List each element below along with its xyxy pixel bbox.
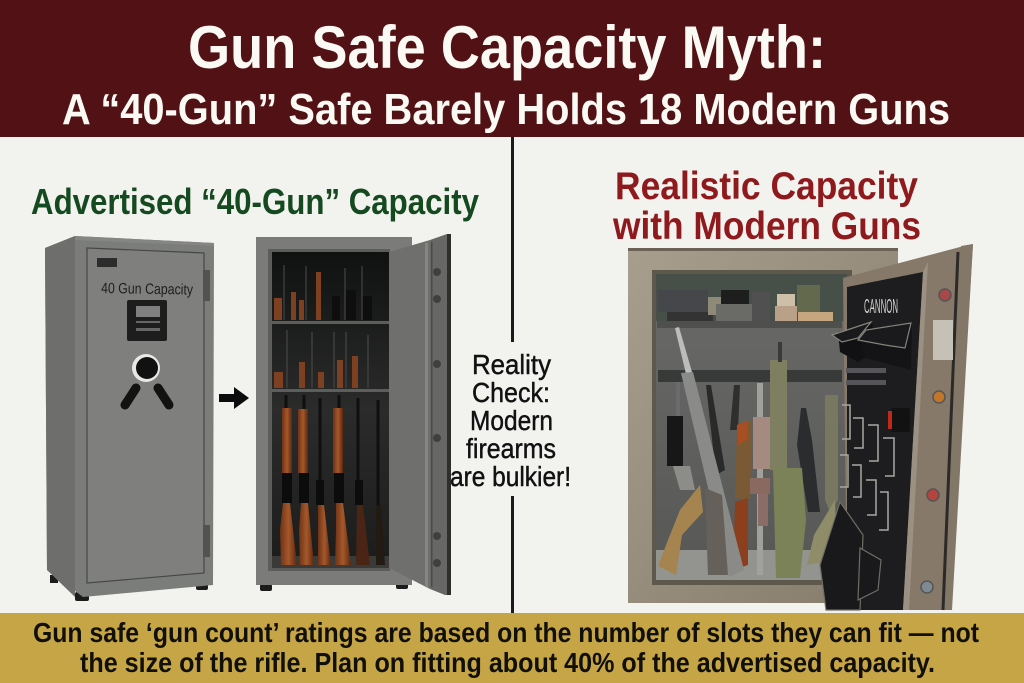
shelves [272,321,389,392]
title line 1: Gun Safe Capacity Myth: [188,14,826,81]
door inner panel [847,272,923,610]
rack post [757,383,763,575]
open door [389,240,430,589]
locking bolts [433,268,441,567]
reality check callout: are bulkier! [450,461,571,492]
pink scope [753,417,770,469]
vent slots [846,368,886,385]
closed gray safe [45,236,214,601]
top shelf items [658,285,833,321]
left heading: Advertised “40-Gun” Capacity [31,181,479,222]
reality check callout: Reality [472,349,551,380]
footer banner [0,613,1024,683]
badge [97,258,117,267]
door label: 40 Gun Capacity [101,280,194,299]
open door frame [843,244,973,610]
orange wood stock [733,498,748,570]
reality check callout: Modern [470,405,553,436]
interior [272,252,390,568]
reality check callout: Check: [472,377,550,408]
bottom pouches [820,502,881,610]
door bolts [921,289,951,593]
door top pouches [832,322,912,370]
open bronze safe with modern guns [628,244,973,610]
open bronze safe with modern guns: CANNON [864,296,898,318]
middle shelf guns [274,356,358,388]
reality check callout [450,349,571,492]
right heading [612,165,921,248]
door hinges [203,270,210,557]
right heading: Realistic Capacity [615,165,918,208]
black rifle [797,408,820,512]
keypad [127,300,167,341]
title banner [0,0,1024,137]
title line 2: A “40-Gun” Safe Barely Holds 18 Modern Guns [62,85,950,134]
shelf [657,321,842,328]
open gray safe [256,234,451,595]
arrow [219,387,249,409]
rack [658,370,842,382]
holster [891,408,910,432]
safe door [87,248,204,583]
footer line 2: the size of the rifle. Plan on fitting about 40% of the advertised capacity. [80,647,935,678]
safe interior [656,274,847,580]
camo shotgun [825,395,838,512]
green rifle [770,360,787,470]
handles [125,388,169,405]
right heading: with Modern Guns [612,205,921,248]
door sticker [933,320,953,360]
tan rifle [658,485,703,575]
top shelf guns [274,272,321,320]
long guns [280,395,385,565]
reality check callout: firearms [466,433,556,464]
center divider [511,137,514,613]
dial [132,354,160,382]
gray long-range rifle [675,327,692,374]
guns [658,327,838,578]
pistol pegs [840,405,894,530]
